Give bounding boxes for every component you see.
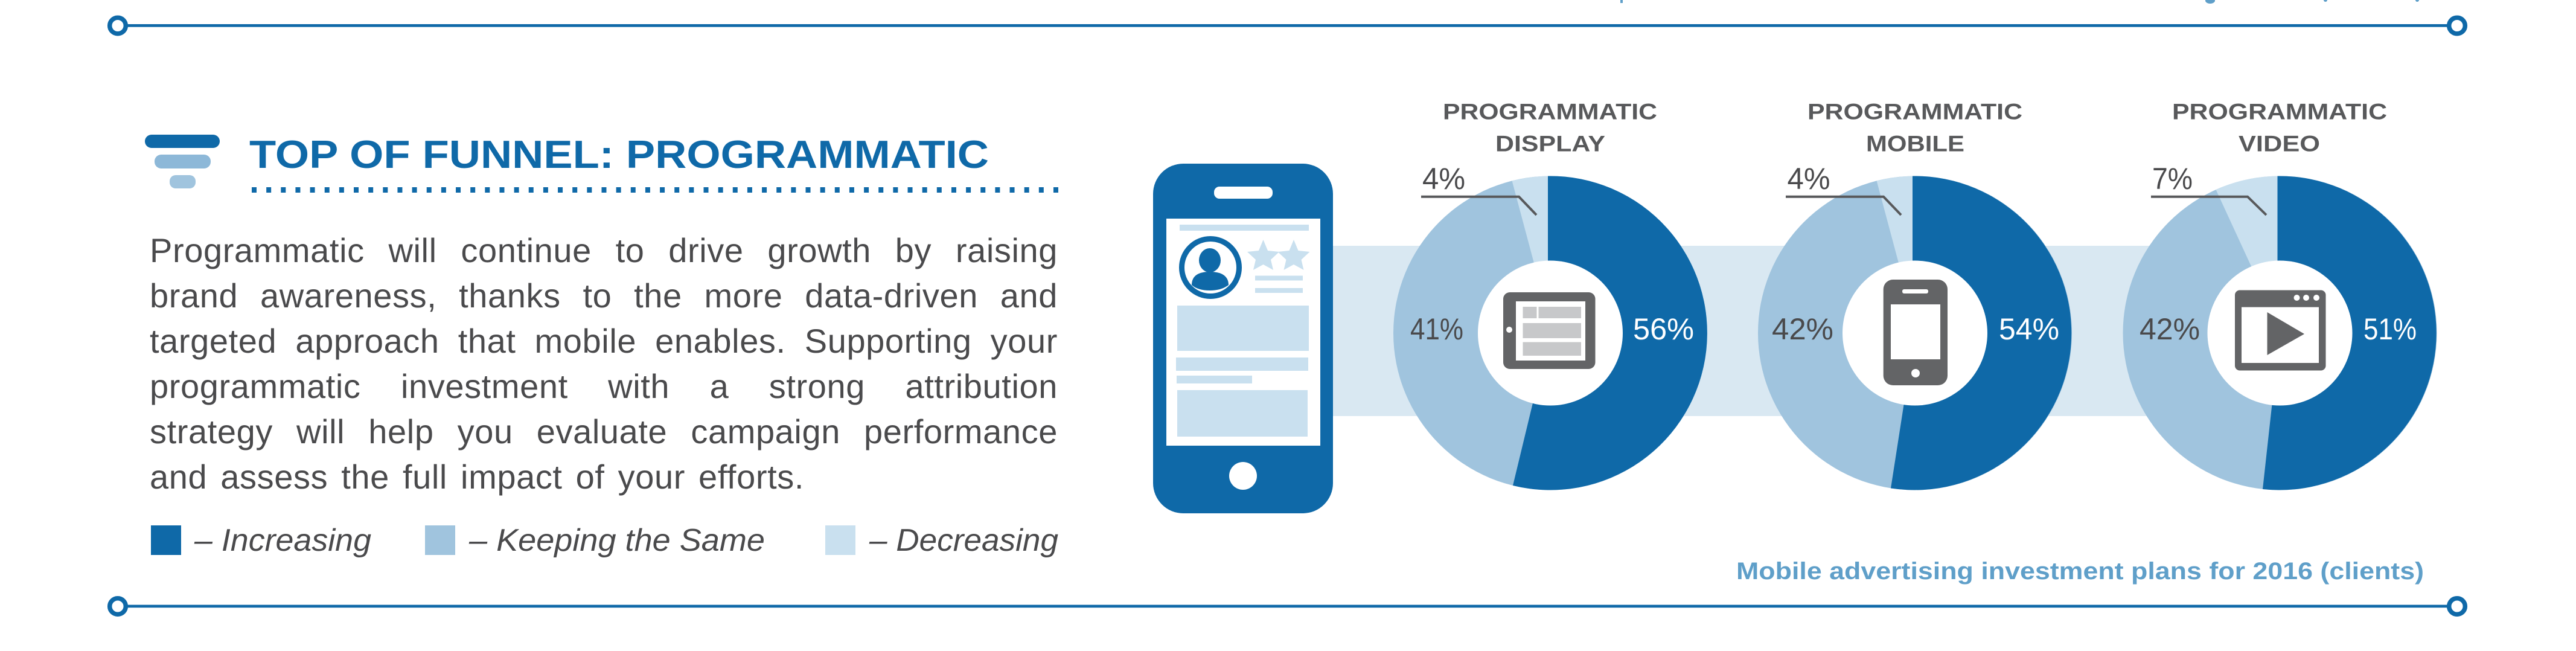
callout: 7% decreasing: [2151, 162, 2266, 215]
donut chart: display: [1393, 176, 1707, 490]
value: 51% increasing: 51%: [2363, 312, 2417, 346]
value: 56% increasing: 56%: [1633, 312, 1694, 346]
body text: targeted approach that mobile enables. Supporting your: [150, 322, 1058, 360]
body text: brand awareness, thanks to the more data-driven and: [150, 277, 1058, 315]
callout: 4% decreasing: 4%: [1787, 162, 1830, 196]
icon: funnel: [145, 135, 220, 188]
chart title: programmatic display: [1443, 99, 1657, 156]
caption: Mobile advertising investment plans for 2016 (clients): [1736, 558, 2424, 585]
chart title: programmatic video: [2172, 99, 2387, 156]
panel: programmatic video: [2123, 99, 2437, 490]
icon: tablet: [1503, 292, 1595, 369]
chart title: programmatic display: DISPLAY: [1495, 132, 1605, 156]
chart title: programmatic video: VIDEO: [2239, 132, 2320, 156]
connecting band behind donuts: [1328, 246, 2173, 416]
donut chart: video: [2123, 176, 2437, 490]
body text: and assess the full impact of your efforts.: [150, 458, 804, 496]
legend: increasing: – Increasing: [194, 523, 371, 558]
body text: strategy will help you evaluate campaign performance: [150, 412, 1058, 451]
value: 42% keeping the same: 42%: [2140, 312, 2200, 346]
legend: [151, 523, 1058, 558]
panel: programmatic mobile: [1758, 99, 2072, 490]
value: 41% keeping the same: 41%: [1410, 312, 1463, 346]
chart title: programmatic video: PROGRAMMATIC: [2172, 99, 2387, 124]
clipped descenders from the section above: [1620, 0, 2419, 4]
icon: video player: [2235, 290, 2325, 371]
legend: decreasing: – Decreasing: [869, 523, 1058, 558]
callout: 4% decreasing: 4%: [1422, 162, 1465, 196]
chart title: programmatic display: PROGRAMMATIC: [1443, 99, 1657, 124]
heading dotted underline: [252, 187, 1059, 193]
donut chart: mobile: [1758, 176, 2072, 490]
callout: 4% decreasing: [1421, 162, 1536, 215]
body text: Programmatic will continue to drive growth by raising: [150, 231, 1058, 269]
callout: 7% decreasing: 7%: [2152, 162, 2193, 196]
chart title: programmatic mobile: PROGRAMMATIC: [1807, 99, 2022, 124]
value: 54% increasing: 54%: [1999, 312, 2059, 346]
body text: programmatic investment with a strong attribution: [150, 367, 1058, 405]
top rule with end circles: [110, 18, 2465, 34]
bottom rule with end circles: [110, 598, 2465, 614]
icon: smartphone with app screen: [1153, 164, 1333, 513]
body text: [150, 231, 1058, 496]
value: 42% keeping the same: 42%: [1772, 312, 1833, 346]
heading: TOP OF FUNNEL: PROGRAMMATIC: [249, 132, 989, 176]
icon: mobile phone: [1884, 280, 1948, 385]
chart title: programmatic mobile: [1807, 99, 2022, 156]
panel: programmatic display: [1393, 99, 1707, 490]
legend: keeping the same: – Keeping the Same: [468, 523, 765, 558]
callout: 4% decreasing: [1786, 162, 1901, 215]
chart title: programmatic mobile: MOBILE: [1866, 132, 1964, 156]
